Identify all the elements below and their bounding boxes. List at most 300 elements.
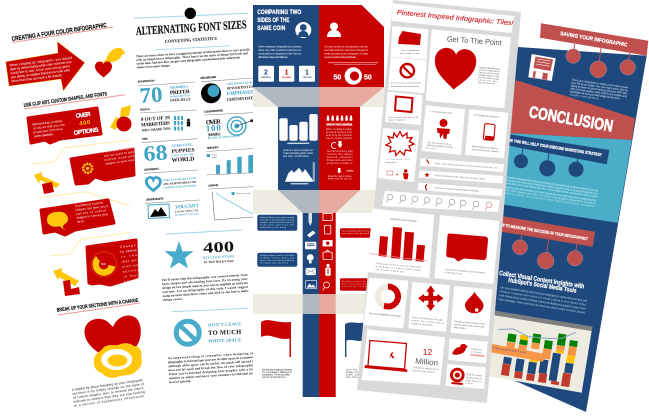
panel: four color infographic: [6, 22, 146, 408]
tile: person statistic: [422, 105, 465, 155]
stat: 70 squirrels: INFORMATION: [137, 79, 155, 84]
stat: use your colors: [200, 75, 257, 103]
tile: donut: [363, 278, 408, 328]
tile: get to the point heart: Get To The Point: [447, 35, 503, 47]
text block: white space paragraph: minutes to adjust and move your elements to find that just: [169, 371, 256, 380]
text block: right flag: other color on: [346, 374, 367, 376]
tile: explosion: [378, 128, 419, 182]
text block: right intro: [324, 44, 368, 59]
middle red: group your shapes: You can do this by right: [327, 150, 353, 153]
section: teal strategy: The more shares you earn, the better your graphic will perform in search.: [505, 188, 597, 205]
tile: phone statistic: representing smart statistics: [471, 148, 500, 154]
callout: over 400 options: of clip art that you can: [33, 123, 65, 130]
callout: donut chart: by adding: [120, 248, 137, 254]
text block: left flag: the comparison. Making it to: [262, 371, 293, 374]
text block: right intro: create two parts to your infographic. In case: [324, 52, 368, 56]
text block: breaking up sections: at a section of explanatory information.: [74, 394, 146, 408]
arrow callout: intro: When creating an infographic, you should: [9, 56, 72, 67]
stat: inbound marketers heart: ARE RESPONSIBLE FOR: [163, 181, 197, 186]
text block: saving: Once your infographic is ready, you'll want to save: [572, 78, 629, 89]
text block: breaking up sections: A helpful tip about breaking up your infographic: [72, 378, 144, 392]
tile: speech bubble: Use speech bubbles and messages: [445, 269, 486, 275]
section: teal strategy: earn links and social shares over time. Add a call-to-action and embed code to make: [506, 181, 598, 199]
tile: bird: on Twitter: [471, 350, 482, 354]
text block: right intro: You can do this by changing the color for: [324, 44, 368, 48]
subtitle: CONVEYING STATISTICS: [165, 36, 217, 44]
text block: intro: There are times when we have a staggering amount of information that we can't provide: [136, 47, 250, 58]
text block: white space paragraph: does not let spoil and break the flow of your infographic.: [168, 363, 255, 372]
stat: 400 billion stars: [203, 239, 235, 264]
section: teal strategy: sharing easy, and promote your work across all of your blog and social media channels.: [505, 185, 597, 203]
callout: cloud icon: shapes can give you a: [75, 204, 109, 212]
tile: get to the point heart: notice the data.: [478, 78, 499, 83]
heading: comparing two sides: [257, 9, 301, 32]
middle red: group your shapes: programs to make it.: [327, 162, 353, 165]
tile: person statistic: illustrate statistics involving: [427, 144, 454, 149]
tile: bird: @HubSpotDesign: [470, 353, 485, 358]
stat: 68 years: PUPPIES: [171, 147, 195, 155]
text block: right intro: you use one to show what and which side: [324, 55, 356, 59]
middle red: group your shapes: Powerpoint and other: [327, 159, 353, 162]
tile: no sign: to consistent colors and spacing: [391, 85, 420, 88]
stat: 70 squirrels: 70: [139, 81, 163, 108]
stat: 68 years: TIME: [142, 137, 148, 141]
stat: over 100 shapes: BE USED TO CREATE GRAPHS: [208, 135, 241, 140]
text block: left flag: Use the same shape for showing: [262, 368, 293, 372]
stat: 400 billion stars: 400: [203, 239, 234, 257]
top half: red: [319, 5, 384, 87]
text block: left flag: [262, 368, 293, 379]
band: conclusion: CONCLUSION: [528, 103, 614, 136]
tile: four way arrows: Show relationships through: [412, 316, 444, 322]
callout: cloud icon: variety of useful: [76, 208, 106, 216]
chart: graphs line: GRAPHS: [208, 183, 218, 188]
stat: other thoughts image: WITHOUT IMAGES: [175, 212, 200, 217]
tile: bar chart: [367, 208, 434, 278]
icon: yellow arrow and red circle: [110, 105, 132, 132]
tile: laptop and 12 million: person your project: [413, 369, 435, 374]
tile: four way arrows: arrows. It's a simple way to: [411, 319, 444, 325]
icon: yellow arrow and red L shape: [53, 268, 80, 296]
heading: don't leave too much white space: [208, 321, 241, 343]
callout: custom shapes wheel: [71, 146, 135, 184]
text block: white space paragraph: infographic is to keep from your use of white space in a common: [168, 355, 254, 364]
text block: left intro: [258, 44, 302, 59]
strips: list items: [418, 158, 504, 196]
tile: square: [385, 92, 423, 125]
tile: bar chart: Show your metrics, ideas or data with: [376, 262, 422, 269]
stat boxes: ONE ITEM: [303, 77, 312, 79]
strips: list items: Most of the tiles are very Tiles from an item in there: [435, 174, 486, 181]
text block: breaking up sections: indicate to viewers that they are now looking: [73, 390, 145, 404]
icon: yellow arrow and red square: [34, 172, 60, 194]
text block: saving: load faster. Be sure your final image can be seen: [570, 89, 620, 100]
background: blue poster: [480, 47, 647, 412]
heading: comparing two sides: SAME COIN: [257, 25, 285, 32]
text block: and other visualizations: [283, 155, 310, 158]
heading: comparing two sides: COMPARING TWO: [257, 9, 301, 16]
stat: 400 billion stars: IN THE MILKY WAY: [204, 259, 235, 264]
callouts: red: Another callout for: [342, 280, 366, 283]
callouts: blue: Simple shapes come in all kinds: [260, 255, 295, 257]
stat: over 100 shapes: 100: [205, 122, 222, 133]
text block: saving: offer the best quality, while JPEGs are smaller and: [570, 86, 628, 98]
tile: bar chart: Sample Bar Graph Infographic: [390, 218, 418, 223]
icon: teal star: [164, 241, 194, 268]
stat: 68 years: 68: [143, 139, 168, 166]
band: conclusion: [508, 80, 635, 140]
middle red: group your shapes: When creating a shape: [326, 128, 353, 131]
stat: use your colors: EMPHASIZE: [226, 89, 257, 97]
chart: timelines bars: TIMELINES: [206, 145, 219, 150]
tile: webcam: Webcam videos: [466, 374, 483, 377]
text block: right flag: the other side: [346, 376, 367, 379]
chart: timelines bars: Series: [212, 157, 217, 159]
tile: drop: miles of water: [453, 326, 466, 330]
text block: left intro: simply split your infographic in half. Use two: [258, 52, 302, 56]
stat: use your colors: OF YOUR TEXT CAN: [226, 84, 256, 90]
heading: don't leave too much white space: TO MUCH: [208, 329, 241, 337]
callout: over 400 options: online database.: [34, 132, 54, 138]
band: saving your infographic: [540, 23, 648, 56]
tile: get to the point heart: to cover a main point of: [479, 68, 500, 73]
band: how to measure success: HOW TO MEASURE THE SUCCESS OF YOUR INFOGRAPHIC?: [497, 222, 589, 241]
tile: bird: Follow me: [471, 349, 483, 352]
column: icons: [253, 213, 373, 397]
text block: insights: Look closely at the number of views, shares and leads your graphic brings in over: [499, 293, 586, 311]
callouts: red: your own to this list to fill: [342, 232, 370, 235]
text block: left intro: distinct colors and give each side its own.: [258, 55, 289, 59]
stat boxes: 1: [285, 70, 289, 76]
callouts: red: [340, 228, 372, 291]
callouts: red: You could also add a few of: [342, 230, 369, 232]
middle blue: bars and mountain: [278, 107, 319, 190]
tile: bar chart: set of stats without text.: [375, 268, 406, 274]
stat: 50 50 donut: 50: [334, 74, 341, 82]
text block: breaking up sections: sections is by simply change up the style of: [72, 382, 144, 396]
stat: 70 squirrels: WORDS BETTER: [170, 94, 190, 99]
tile: get to the point heart: interest and be clear.: [478, 71, 500, 76]
callout: cloud icon: data.: [77, 219, 85, 224]
icon: person left: [295, 22, 311, 38]
callouts: blue: Some of these icons were created: [260, 216, 295, 219]
strips: list items: The above is the one natural reader of the team: [435, 187, 479, 193]
section: teal strategy: and generate new leads. People love sharing visual content, so a great infographic can: [506, 178, 598, 196]
icons: red column: [323, 214, 332, 290]
arrow callout: intro: [6, 42, 85, 91]
icon row: lower circles: [512, 233, 583, 269]
icon: person right: [327, 22, 341, 37]
heading: creating a four color infographic: CREATING A FOUR COLOR INFOGRAPHIC: [11, 22, 108, 43]
stat: inbound marketers heart: FINDING LIFE ON MARS: [163, 184, 197, 190]
stat: over 100 shapes: [204, 108, 253, 140]
callout: cloud icon: [41, 200, 114, 235]
heading: break up your sections: BREAK UP YOUR SECTIONS WITH A CHANGE: [57, 298, 139, 314]
heading: collect visual content insights: HubSpot's Social Media Tools: [508, 277, 577, 295]
section: teal strategy: [495, 133, 632, 223]
icon row: top circles: [566, 44, 635, 78]
band: how to measure success: [497, 216, 595, 247]
heading: don't leave too much white space: WHITE SPACE: [208, 337, 241, 343]
stat boxes: [258, 66, 315, 82]
tile: four way arrows: [408, 282, 450, 332]
tile: phone statistic: [465, 109, 508, 158]
callouts: blue: shapes and selected items to: [260, 221, 295, 224]
stat: 68 years: WORLD: [171, 156, 195, 164]
arrow callout: intro: you plenty of creative freedom to work with.: [11, 68, 71, 79]
band 2: [253, 190, 385, 213]
tile: explosion: ...I finished this: [385, 158, 410, 161]
tile: person statistic: Use the person icon to: [427, 141, 452, 146]
stat: inbound marketers heart: [144, 167, 198, 190]
panel: alternating font sizes: [134, 8, 257, 384]
stat: over 100 shapes: ICONS AND SHAPES: [204, 108, 223, 114]
background: panel white: [253, 0, 398, 400]
stat: 9 out of 10: WILL SHARE THIS: [141, 126, 171, 132]
text block: white space paragraph: An important thing to remember when designing an: [168, 351, 254, 360]
stat boxes: 2: [264, 70, 268, 76]
tile: webcam: show others in: [465, 379, 482, 383]
callouts: red: data that may be: [342, 282, 367, 286]
stat: 9 out of 10: MARKETERS: [141, 121, 170, 128]
text block: create interesting graphs, charts: [283, 152, 314, 155]
chart: timelines bars: Series: [212, 154, 217, 156]
panel: conclusion poster: [480, 23, 648, 412]
text block: white space paragraph: When you've finished designing your graphic, take a few: [168, 367, 255, 376]
icons: blue column: [305, 213, 317, 288]
text block: saving: going to Save As and choosing a format. PNG files: [571, 83, 628, 95]
text block: insights: [498, 285, 588, 315]
text block: saving: your file as an image. You can export each slide by: [571, 80, 629, 92]
text block: custom shapes paragraph: You'll notice that this infographic was created entirely from: [162, 273, 248, 282]
band 1: [253, 87, 390, 107]
title: ALTERNATING FONT SIZES: [135, 17, 247, 38]
heading: comparing two sides: SIDES OF THE: [257, 17, 290, 24]
bar chart: [279, 114, 318, 141]
top half: blue: [253, 5, 319, 87]
tile: get to the point heart: A bigger image is a fast: [478, 73, 500, 78]
callout: over 400 options: Microsoft has a variety: [32, 119, 63, 126]
callouts: blue: of styles: circles, boxes and: [260, 256, 295, 260]
text block: saving: clearly everywhere.: [569, 92, 600, 101]
chart: stacked bars dashboard: [488, 310, 592, 393]
title tile: Pinterest Inspired Infographic: Tiles!: [397, 10, 514, 27]
tile: no sign: [388, 57, 427, 93]
stat: inbound marketers heart: INBOUND MARKETERS: [163, 177, 197, 182]
stat: 9 out of 10: PEOPLE: [140, 107, 150, 112]
callout: donut chart: to the: [121, 253, 137, 259]
chart: stacked bars dashboard: InboundTimeTrue: [492, 346, 526, 355]
middle red: group your shapes: way to simple graphic: [326, 137, 353, 140]
callouts: blue: the ideas you see here: [260, 262, 289, 264]
text block: right flag: Use the same: [346, 368, 367, 372]
tile: explosion: infographic: [385, 161, 398, 164]
tile: get to the point heart: way to make people: [478, 76, 500, 81]
text block: breaking up sections: of custom shapes, text, or reverse the colors.: [73, 386, 145, 400]
text block: insights: compare it against other pieces of visual content in your library today.: [499, 289, 587, 307]
tile: drop: The total amount of water on the: [454, 320, 486, 326]
chart: graphs line: Series one value: [236, 193, 252, 195]
heading: use clip art: USE CLIP ART, CUSTOM SHAPES, AND FONTS: [23, 91, 108, 109]
text block: left flag: comparison. The red and blue: [262, 374, 291, 376]
section: teal strategy: Every visitor is a possible new lead and future customer.: [504, 191, 596, 208]
tile: cube: tiles in blocks of data: [400, 52, 421, 55]
text block: saving: [569, 78, 629, 104]
text block: right flag: shape with the: [346, 371, 367, 374]
callout: over 400 options: OVER: [75, 111, 92, 120]
middle red: group your shapes: Good the rest to where: [328, 175, 352, 178]
middle red: group your shapes: these can be one on: [328, 178, 352, 180]
middle red: group your shapes: grouped shapes that: [326, 131, 352, 134]
pin: [185, 8, 196, 19]
stat: 70 squirrels: PREFER: [170, 89, 190, 96]
stat boxes: WEBSITES: [261, 77, 271, 79]
stat: 50 50 donut: [334, 67, 372, 85]
tile: phone statistic: 3 in 4 people use cell phones: [474, 115, 500, 119]
icon: no sign: [176, 321, 199, 344]
tile: laptop and 12 million: Cartoon the amount of it in: [413, 366, 440, 371]
callout: custom shapes wheel: custom icons and: [104, 154, 135, 162]
arrow callout: intro: start by determining what color scheme you: [10, 60, 72, 71]
tile: get to the point heart: Large tiles should be used: [479, 66, 501, 71]
heading: collect visual content insights: Collect Visual Content Insights with: [499, 270, 585, 290]
stat: 68 years: [142, 137, 197, 166]
tile: laptop and 12 million: 12: [423, 347, 432, 357]
callout: donut chart: 50%: [101, 262, 107, 266]
arrow callout: intro: More than that can look a bit chaotic.: [11, 73, 63, 83]
stat: over 100 shapes: OVER: [206, 118, 221, 126]
text block: custom shapes paragraph: outcome. Use an infographic of this style, I would suggest: [162, 285, 249, 294]
callout: donut chart: in their: [123, 273, 140, 279]
stat: over 100 shapes: SHAPES: [207, 131, 222, 137]
tile: cube: You can organize your: [401, 49, 420, 52]
middle red: group your shapes: tend to be the common: [326, 134, 353, 137]
text block: intro: [136, 47, 251, 69]
strips: list items: Stop: I can't usually get return at having each post in the CTA: [435, 162, 498, 170]
tile: drop: [451, 286, 492, 336]
mountain chart: [285, 162, 315, 184]
tile: phone statistic: Mobile icons can be great for: [472, 145, 498, 150]
callout: cloud icon: Combining custom: [75, 201, 103, 208]
stat: use your colors: A SPLASH OF COLOR: [227, 81, 254, 86]
stat: 70 squirrels: OVER JELLY: [170, 97, 191, 103]
tile: webcam: video: [465, 383, 473, 385]
stat: 9 out of 10: 9 OUT OF 10: [141, 116, 171, 123]
text block: custom shapes paragraph: basic shapes and alternating font sizes. By focusing your: [162, 277, 248, 286]
background: grey board: [357, 0, 521, 403]
tile: bar chart: a bar graph. It's easy to show a huge: [376, 265, 422, 272]
text block: insights: each campaign. Those numbers can show you what to make next time around.: [498, 297, 586, 315]
callout: donut chart: Change: [120, 243, 136, 249]
stat: 70 squirrels: [137, 79, 195, 108]
text block: left flag: version should fit here.: [262, 376, 286, 379]
stat boxes: BIG DATA: [282, 76, 292, 79]
stat: other thoughts image: LOOK SPECIAL: [175, 209, 199, 214]
tile: cube: [391, 26, 428, 60]
callout: custom shapes wheel: can be used to add: [104, 150, 134, 158]
middle red: group your shapes: GROUP YOUR SHAPES!: [326, 122, 352, 126]
tile: person statistic: people: [426, 147, 437, 150]
stat: 50 50 donut: 50: [364, 74, 372, 82]
text block: left intro: When creating an infographic for comparing: [258, 44, 302, 48]
text block: insights: Use your analytics tools to track how your infographic is performing over time and: [500, 285, 588, 303]
callout: donut chart: stick out: [122, 263, 139, 269]
title tile: [392, 3, 514, 33]
text block: white space paragraph: [168, 351, 256, 384]
tile: webcam: are great tiles to: [466, 376, 483, 380]
tile: drop: world is about 332 million cubic: [454, 323, 486, 329]
text block: white space paragraph: level of spacing.: [169, 379, 191, 384]
stat: other thoughts image: YOU CAN'T: [175, 204, 200, 211]
tile: get to the point heart: Use the best one.: [478, 81, 496, 86]
callouts: blue: [257, 215, 297, 267]
heading: don't leave too much white space: DON'T LEAVE: [208, 321, 241, 327]
callout: donut chart: section: [123, 268, 139, 274]
callouts: blue: lines. You can easily build on: [260, 260, 295, 262]
callouts: blue: make your own from the: [260, 224, 295, 226]
icon: red heart with yellow burst: [84, 316, 142, 378]
text block: custom shapes paragraph: using no more than three colors and stick to one font to make: [162, 289, 249, 298]
text block: custom shapes paragraph: [162, 273, 250, 302]
middle red: group your shapes: clicking the shapes: [327, 153, 353, 156]
text block: [283, 149, 314, 158]
stat: other thoughts image: [145, 196, 200, 218]
arrow callout: intro: would like to use. A four color set-up gives: [10, 64, 70, 75]
band 3 across columns: [253, 294, 373, 314]
heading: break up your sections: [57, 298, 140, 315]
middle red: group your shapes: selected, grouped in: [327, 156, 353, 159]
chart: graphs line: [208, 183, 253, 220]
callout: donut chart: [87, 240, 141, 285]
panel: comparing two sides of the same coin: [253, 0, 398, 400]
tile: laptop and 12 million: Million: [415, 357, 439, 367]
tile: four way arrows: explain a few ideas.: [411, 323, 434, 327]
text block: breaking up sections: [72, 378, 146, 408]
callouts: blue: entirely in PowerPoint, mixing: [260, 218, 295, 222]
stat: 68 years: TAKE OVER THE: [172, 153, 194, 157]
callout: custom shapes wheel: Form-like thingies: [103, 146, 134, 154]
icon: bird and heart: [95, 48, 126, 78]
tile: get to the point heart: [426, 29, 511, 108]
callout: over 400 options: OPTIONS: [73, 127, 99, 137]
stat: 9 out of 10: [140, 107, 197, 132]
text block: Look for a series of shapes to: [283, 149, 314, 152]
middle red: group your shapes: [319, 107, 360, 190]
text block: intro: with an image-heavy infographic. These fonts can the make of things feel fresh and: [136, 51, 248, 62]
stat: 70 squirrels: SQUIRRELS: [170, 84, 188, 90]
stat: other thoughts image: OTHER THOUGHTS: [145, 196, 164, 202]
tile: bird: [448, 338, 488, 363]
tile: speech bubble: in two tile or two.: [445, 271, 463, 276]
heading: creating a four color infographic: [11, 22, 113, 43]
text block: left intro: ideas, one of the simplest formats that is to: [258, 48, 302, 52]
chart: timelines bars: [206, 145, 253, 175]
callouts: blue: collection in the menu: [260, 226, 287, 229]
flag: red: [261, 320, 291, 357]
stat boxes: 1: [305, 70, 309, 76]
text block: intro: choice of too many images.: [136, 63, 171, 69]
section: teal strategy: Creating infographics for inbound marketing is a powerful way to attract visitors to your site: [507, 175, 599, 193]
tile: speech bubble: [434, 215, 499, 284]
text block: custom shapes paragraph: design on two simple aspects, you can accomplish an intricate: [162, 281, 249, 290]
strip: magnifier row: [382, 191, 500, 212]
callout: over 400 options: 400: [79, 120, 91, 127]
callout: cloud icon: images to convey your: [76, 212, 108, 220]
tile: square: Use a variety of tile sizes to fill: [388, 116, 418, 119]
callouts: red: placed by icons: [342, 286, 367, 288]
stat: inbound marketers heart: SENTIMENTS: [144, 167, 159, 172]
tile: donut: Donut charts highlight a percentage: [369, 312, 402, 318]
